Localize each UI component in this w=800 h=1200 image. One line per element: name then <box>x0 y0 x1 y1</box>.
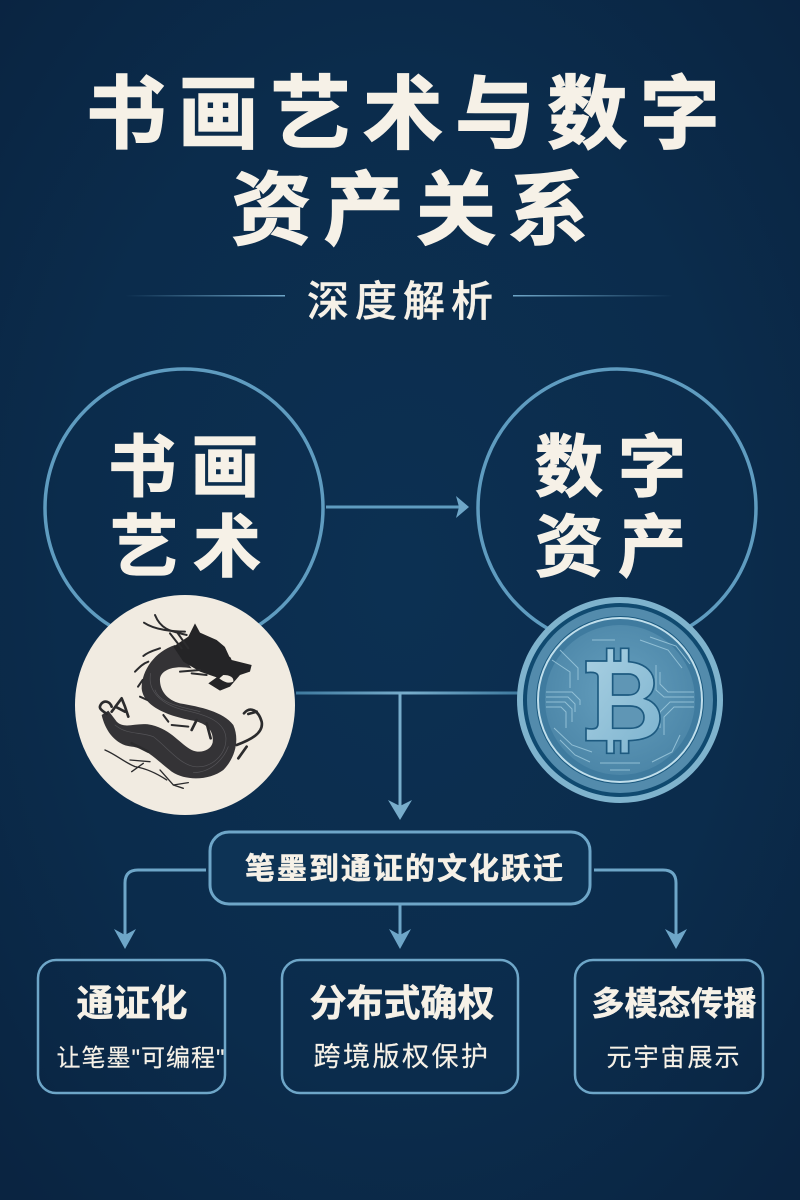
title <box>86 70 732 255</box>
arrow: to multimodal spread <box>594 870 687 949</box>
card: tokenization: 通证化 <box>76 983 188 1024</box>
card: distributed rights: 分布式确权 <box>310 983 494 1024</box>
card: tokenization <box>38 960 226 1093</box>
connector: to central box <box>296 692 518 820</box>
card: multimodal spread: 多模态传播 <box>592 985 756 1022</box>
title: 书画艺术与数字 <box>86 70 732 159</box>
card: tokenization: 让笔墨"可编程" <box>56 1045 226 1072</box>
central box: cultural leap <box>210 832 590 904</box>
circuit traces <box>546 637 694 770</box>
circle: calligraphy art: 艺术 <box>110 510 276 586</box>
card: multimodal spread: 元宇宙展示 <box>606 1044 742 1072</box>
circle: calligraphy art <box>45 369 323 647</box>
subtitle: 深度解析 <box>307 278 499 325</box>
dragon body <box>102 645 236 778</box>
arrow: art to assets <box>326 496 469 518</box>
card: distributed rights <box>282 960 518 1093</box>
circle: digital assets: 资产 <box>535 510 701 586</box>
dragon head <box>173 623 252 691</box>
title: 资产关系 <box>231 166 601 255</box>
card: distributed rights: 跨境版权保护 <box>314 1042 490 1072</box>
dragon claws <box>100 698 262 758</box>
bitcoin symbol <box>586 648 660 753</box>
circle: calligraphy art: 书画 <box>108 430 274 506</box>
dragon horns and mane <box>135 615 207 727</box>
central box: cultural leap: 笔墨到通证的文化跃迁 <box>245 853 565 886</box>
card: multimodal spread <box>575 960 763 1093</box>
circle: digital assets <box>478 369 756 647</box>
icon: ink dragon medallion <box>75 595 295 815</box>
arrow: to tokenization <box>114 870 206 949</box>
circle: digital assets: 数字 <box>535 430 701 506</box>
icon: bitcoin coin <box>517 597 723 803</box>
dragon tail <box>105 750 188 788</box>
arrow: to distributed rights <box>389 905 411 949</box>
dragon scale texture <box>115 673 228 773</box>
